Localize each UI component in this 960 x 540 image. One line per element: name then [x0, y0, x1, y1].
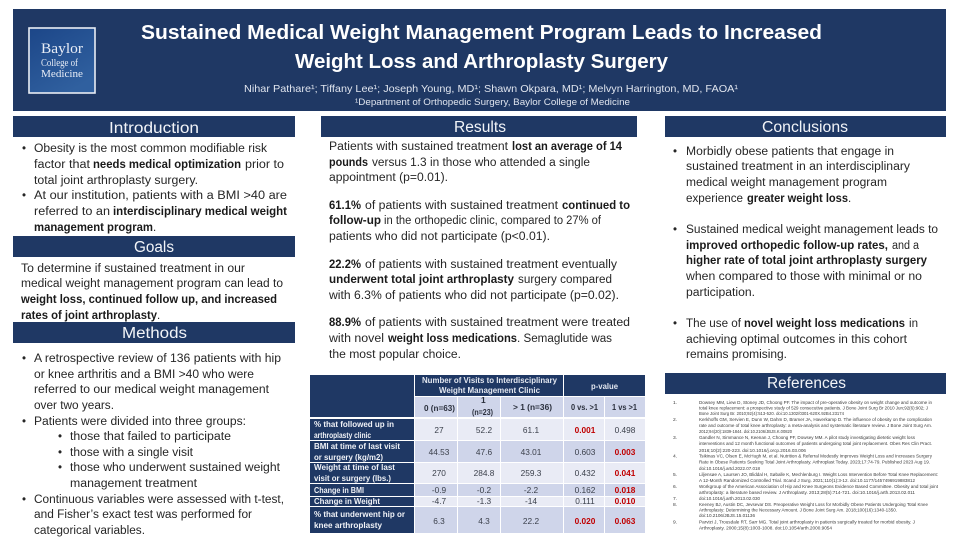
conclusion: follow-up and surgery: higher rate of total joint arthroplasty surgery	[686, 255, 928, 267]
reference list: Arthroplasty. 2000;15(8):1003-1008. doi:10.1054/arth.2000.9054	[699, 526, 832, 532]
heading: Conclusions: Conclusions	[762, 119, 848, 136]
result: medications: 88.9%	[329, 317, 361, 329]
reference list: Parvizi J, Trousdale RT, Sarr MG. Total joint arthroplasty in patients surgically treated for morbid obesity. J	[699, 520, 916, 526]
row: weight: 0.432	[575, 468, 596, 478]
row: arthroplasty: 6.3	[433, 516, 445, 526]
panel: conclusions	[665, 116, 946, 361]
heading: Introduction	[13, 116, 295, 137]
title: Weight Loss and Arthroplasty Surgery	[295, 50, 669, 73]
row: follow-up: arthroplasty clinic	[314, 430, 371, 440]
row: BMI: 43.01	[521, 447, 542, 457]
row: change in weight: Change in Weight	[314, 496, 380, 506]
conclusion: medications: achieving optimal outcomes in this cohort	[686, 334, 908, 346]
row: BMI: 47.6	[476, 447, 492, 457]
result: weight loss: pounds	[329, 157, 368, 169]
row: follow-up: 27	[434, 425, 444, 435]
methods text: referred to our medical weight management	[34, 384, 270, 396]
heading: References: References	[767, 375, 846, 392]
row: change in BMI: 0.018	[615, 485, 636, 495]
result: medications	[328, 317, 630, 361]
conclusion: weight loss: .	[848, 193, 851, 205]
row: follow-up: 61.1	[523, 425, 539, 435]
introduction text: Obesity is the most common modifiable risk	[34, 143, 267, 155]
row: weight: 0.041	[615, 468, 636, 478]
conclusion: weight loss: experience	[686, 193, 743, 205]
row: follow-up: 52.2	[476, 425, 492, 435]
heading: Introduction: Introduction	[109, 120, 199, 137]
introduction text: factor that	[34, 159, 91, 171]
reference list: Kerkhoffs GM, Servien E, Dunn W, Dahm D, Bramer JA, Haverkamp D. The influence of obesity on the complication	[699, 417, 932, 423]
introduction text: .	[153, 222, 156, 234]
methods text: •	[58, 431, 62, 443]
goals text	[20, 263, 283, 322]
reference list: Rate in Obese Patients Seeking Total Joint Arthroplasty. Arthroplast Today. 2023;17:74-79. Published 2023 Aug 19.	[699, 460, 930, 466]
reference list: doi:10.1016/j.arth.2013.02.030	[699, 496, 760, 502]
table header: 0 (n=63)	[424, 403, 455, 413]
result: arthroplasty: underwent total joint arthroplasty	[329, 274, 515, 286]
reference list: 1.	[673, 400, 677, 406]
row: follow-up: 0.498	[615, 425, 636, 435]
row: arthroplasty: % that underwent hip or	[314, 509, 406, 519]
panel: methods	[13, 322, 295, 537]
conclusion: weight loss	[673, 146, 910, 205]
row: change in weight: 0.010	[615, 496, 636, 506]
heading: References	[665, 373, 946, 394]
methods text: A retrospective review of 136 patients with hip	[34, 353, 281, 365]
panel: goals	[13, 236, 295, 322]
row: BMI: 0.603	[575, 447, 596, 457]
introduction text: management program	[34, 222, 153, 234]
row: change in BMI: -0.2	[477, 485, 492, 495]
methods text: or knee arthritis and a BMI >40 who were	[34, 369, 254, 381]
reference list	[673, 400, 939, 532]
conclusion: follow-up and surgery: •	[673, 224, 677, 236]
heading: Results: Results	[454, 119, 506, 136]
row: BMI	[310, 441, 645, 462]
result: follow-up: continued to	[562, 200, 630, 212]
introduction text: referred to an	[34, 206, 110, 218]
row: change in BMI: -0.9	[432, 485, 447, 495]
result: follow-up: of patients with sustained treatment	[365, 200, 559, 212]
reference list: Dowsey MM, Liew D, Stoney JD, Choong PF. The impact of pre-operative obesity on weight change and outcome in	[699, 400, 932, 406]
row: weight	[310, 462, 645, 483]
row: arthroplasty: 0.020	[575, 516, 596, 526]
reference list: 6.	[673, 484, 677, 490]
heading: Goals	[13, 236, 295, 257]
reference list: Gandler N, Simmance N, Keenan J, Choong PF, Dowsey MM. A pilot study investigating dietetic weight loss	[699, 435, 916, 441]
conclusion: weight loss: •	[673, 146, 677, 158]
row: weight: 270	[432, 468, 446, 478]
conclusion: medications: novel weight loss medications	[744, 318, 905, 330]
heading: Goals: Goals	[134, 239, 174, 256]
conclusion: medications: The use of	[686, 318, 742, 330]
table header: Number of Visits to Interdisciplinary	[422, 376, 558, 385]
table header: p-value	[591, 382, 619, 391]
logo: Baylor College of Medicine: Baylor	[41, 41, 83, 57]
conclusion: follow-up and surgery: when compared to those with minimal or no	[685, 271, 922, 283]
conclusion: follow-up and surgery: and a	[892, 240, 920, 252]
affiliation: ¹Department of Orthopedic Surgery, Baylor College of Medicine	[355, 97, 630, 108]
conclusion: medications: remains promising.	[686, 349, 787, 361]
result: medications: . Semaglutide was	[517, 333, 612, 345]
row: weight: 259.3	[521, 468, 542, 478]
methods text: over two years.	[34, 400, 114, 412]
table header	[310, 375, 645, 417]
logo: Baylor College of Medicine: Medicine	[41, 69, 83, 80]
row: follow-up	[310, 419, 645, 440]
table header: Weight Management Clinic	[439, 386, 541, 395]
introduction text	[22, 143, 287, 234]
row: weight: Weight at time of last	[314, 462, 395, 472]
conclusion: weight loss: sustained treatment in an interdisciplinary	[686, 161, 910, 173]
table header: 1	[481, 395, 486, 405]
conclusion: medications: in	[909, 318, 918, 330]
result: arthroplasty: with 6.3% of patients who did not participate (p=0.02).	[328, 290, 619, 302]
results table	[310, 375, 645, 533]
panel: introduction	[13, 116, 295, 234]
reference list: 2016;10(2):220-223. doi:10.1016/j.orcp.2016.03.006	[699, 448, 806, 454]
row: change in BMI: -2.2	[524, 485, 539, 495]
result: follow-up: 61.1%	[329, 200, 361, 212]
methods text: •	[22, 416, 26, 428]
logo: Baylor College of Medicine	[29, 28, 95, 93]
result: arthroplasty: 22.2%	[329, 259, 361, 271]
table header: (n=23)	[472, 407, 493, 417]
heading: Results	[321, 116, 637, 137]
goals text: medical weight management program can lead to	[21, 278, 283, 290]
row: arthroplasty	[310, 507, 645, 533]
reference list: Liljensøe A, Laursen JO, Bliddal H, Søballe K, Mechlenburg I. Weight Loss Intervention Before Total Knee Replacement:	[699, 472, 938, 478]
table header: > 1 (n=36)	[513, 402, 552, 412]
methods text	[22, 353, 284, 537]
result: arthroplasty: of patients with sustained treatment eventually	[365, 259, 617, 271]
result: weight loss: lost an average of 14	[512, 141, 623, 153]
conclusion: follow-up and surgery: participation.	[686, 287, 755, 299]
row: BMI: 44.53	[429, 447, 450, 457]
goals text: weight loss, continued follow up, and increased	[20, 294, 277, 306]
reference list: rate and outcome of total knee arthroplasty: a meta-analysis and systematic literature review. J Bone Joint Surg Am.	[699, 423, 932, 429]
result: weight loss: versus 1.3 in those who attended a single	[372, 157, 590, 169]
reference list: A 12-Month Randomized Controlled Trial. Scand J Surg. 2021;110(1):3-12. doi:10.1177/1457496919883812	[699, 478, 915, 484]
row: change in weight: 0.111	[575, 496, 595, 506]
reference list: 5.	[673, 472, 677, 478]
introduction text: •	[22, 143, 26, 155]
reference list: arthroplasty: a literature based review. J Arthroplasty. 2013;28(5):714-721. doi:10.1016/j.arth.2013.02.011	[699, 490, 915, 496]
methods text: Continuous variables were assessed with t-test,	[34, 494, 284, 506]
title: Sustained Medical Weight Management Program Leads to Increased	[141, 21, 822, 44]
result: arthroplasty	[328, 259, 619, 302]
row: BMI: BMI at time of last visit	[314, 441, 400, 451]
conclusion: medications	[673, 318, 918, 361]
conclusion: weight loss: medical weight management program	[686, 177, 887, 189]
panel: results	[321, 116, 637, 361]
introduction text: At our institution, patients with a BMI >40 are	[34, 190, 287, 202]
result: medications: of patients with sustained treatment were treated	[365, 317, 630, 329]
row: arthroplasty: 0.063	[615, 516, 636, 526]
header banner	[13, 9, 946, 111]
table header: 0 vs. >1	[571, 402, 598, 412]
methods text: categorical variables.	[34, 525, 145, 537]
row: weight: 284.8	[474, 468, 495, 478]
result: weight loss: Patients with sustained treatment	[329, 141, 509, 153]
row: weight: visit or surgery (lbs.)	[314, 473, 391, 483]
heading: Methods: Methods	[122, 325, 187, 342]
conclusion: follow-up and surgery: Sustained medical weight management leads to	[686, 224, 938, 236]
methods text: those who underwent sustained weight	[70, 462, 281, 474]
row: change in weight: -14	[525, 496, 537, 506]
reference list: 7.	[673, 496, 677, 502]
row: follow-up: 0.001	[575, 425, 596, 435]
methods text: management treatment	[70, 478, 198, 490]
reference list: 3.	[673, 435, 677, 441]
result: medications: with novel	[328, 333, 384, 345]
reference list: 2012;94(20):1839-1844. doi:10.2106/JBJS.K.00820	[699, 429, 792, 435]
methods text: •	[22, 353, 26, 365]
goals text: .	[157, 310, 160, 322]
row: BMI: 0.003	[615, 447, 636, 457]
result: follow-up: follow-up	[329, 215, 381, 227]
row: arthroplasty: 4.3	[478, 516, 490, 526]
reference list: Tsikinas VC, Olsen E, McHugh M, et al. Nutrition & Referral Modestly Improves Weight Loss and Increases Surgery	[699, 454, 933, 460]
result: follow-up: patients who did not participate (p<0.01).	[329, 231, 550, 243]
reference list: doi:10.2106/JBJS.15.01136	[699, 513, 755, 519]
reference list: doi:10.1016/j.artd.2022.07.018	[699, 466, 760, 472]
result: medications: the most popular choice.	[329, 349, 461, 361]
methods text: •	[22, 494, 26, 506]
row: follow-up: % that followed up in	[314, 419, 394, 429]
methods text: those with a single visit	[70, 447, 194, 459]
introduction text: •	[22, 190, 26, 202]
methods text: those that failed to participate	[70, 431, 231, 443]
table header: 1 vs >1	[612, 402, 637, 412]
conclusion: follow-up and surgery	[673, 224, 938, 299]
panel: references	[665, 373, 946, 532]
reference list: Arthroplasty: Determining the Necessary Amount. J Bone Joint Surg Am. 2018;100(16):1340-1350.	[699, 508, 897, 514]
goals text: To determine if sustained treatment in our	[21, 263, 245, 275]
introduction text: prior to	[245, 159, 284, 171]
row: change in weight: -4.7	[432, 496, 447, 506]
heading: Methods	[13, 322, 295, 343]
row: arthroplasty: 22.2	[523, 516, 539, 526]
row: arthroplasty: knee arthroplasty	[314, 520, 382, 530]
result: medications: weight loss medications	[387, 333, 517, 345]
heading: Conclusions	[665, 116, 946, 137]
reference list: Workgroup of the American Association of Hip and Knee Surgeons Evidence Based Committee. Obesity and total joint	[699, 484, 939, 490]
result: arthroplasty: surgery compared	[518, 274, 612, 286]
reference list: Keeney BJ, Austin DC, Jevsevar DS. Preoperative Weight Loss for Morbidly Obese Patients Undergoing Total Knee	[699, 502, 928, 508]
methods text: Patients were divided into three groups:	[34, 416, 246, 428]
conclusion: follow-up and surgery: improved orthopedic follow-up rates,	[686, 240, 888, 252]
introduction text: total joint arthroplasty surgery.	[34, 175, 198, 187]
result: follow-up	[329, 200, 630, 243]
conclusion: weight loss: Morbidly obese patients that engage in	[686, 146, 894, 158]
conclusion: weight loss: greater weight loss	[747, 193, 848, 205]
introduction text: needs medical optimization	[93, 159, 241, 171]
reference list: 8.	[673, 502, 677, 508]
reference list: 2.	[673, 417, 677, 423]
reference list: total knee replacement: a prospective study of 529 consecutive patients. J Bone Joint Surg Br 2010 Jun;92(6):902; J	[699, 406, 928, 412]
introduction text: interdisciplinary medical weight	[113, 206, 287, 218]
methods text: and Fisher’s exact test was performed for	[34, 509, 252, 521]
authors: Nihar Pathare¹; Tiffany Lee¹; Joseph Young, MD¹; Shawn Okpara, MD¹; Melvyn Harrington, MD, FAOA¹	[244, 83, 739, 95]
reference list: 4.	[673, 454, 677, 460]
row: change in BMI: Change in BMI	[314, 485, 364, 495]
reference list: 9.	[673, 520, 677, 526]
row: change in BMI: 0.162	[575, 485, 596, 495]
conclusion: medications: •	[673, 318, 677, 330]
methods text: •	[58, 447, 62, 459]
row: change in weight: -1.3	[477, 496, 492, 506]
row: change in weight	[310, 496, 645, 506]
goals text: rates of joint arthroplasty	[21, 310, 158, 322]
result: follow-up: in the orthopedic clinic, compared to 27% of	[384, 215, 602, 227]
reference list: interventions and 12 month functional outcomes of patients undergoing total joint replacement. Obes Res Clin Pract.	[699, 441, 932, 447]
title	[141, 21, 822, 73]
result: weight loss: appointment (p=0.01).	[329, 172, 448, 184]
row: BMI: or surgery (kg/m2)	[314, 452, 383, 462]
row: change in BMI	[310, 484, 645, 496]
result: weight loss	[329, 141, 623, 184]
reference list: Bone Joint Surg Br. 2010;92(4):513-520. doi:10.1302/0301-620X.92B4.23174	[699, 411, 844, 417]
methods text: •	[58, 462, 62, 474]
logo: Baylor College of Medicine: College of	[41, 58, 79, 69]
